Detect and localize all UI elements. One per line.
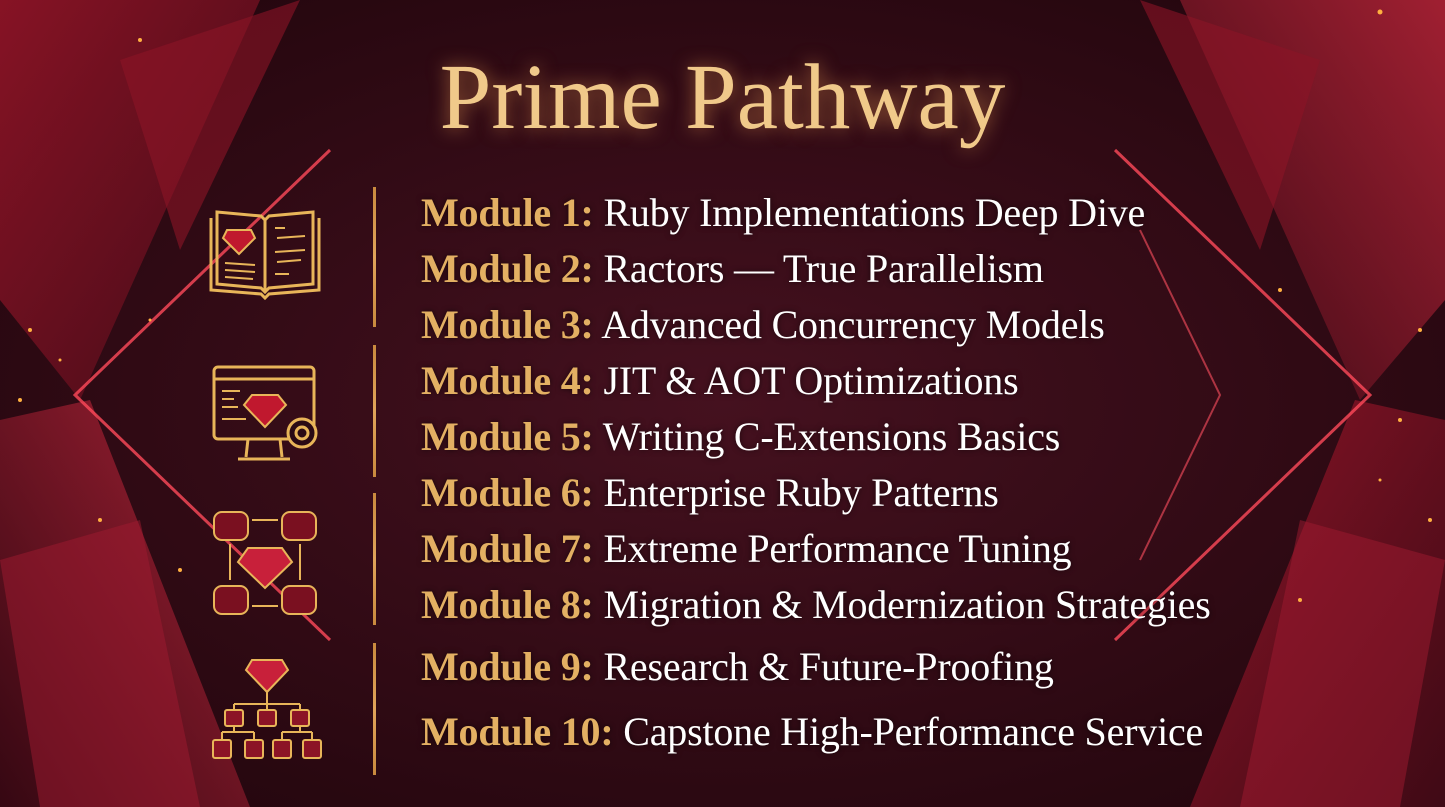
module 8: Module 8: Migration & Modernization Strategies <box>421 582 1211 627</box>
icon: ruby hierarchy <box>212 659 322 759</box>
module 5: Module 5: Writing C-Extensions Basics <box>421 414 1060 459</box>
module 1: Module 1: Ruby Implementations Deep Dive <box>421 190 1145 235</box>
icon: rubies cycle <box>213 511 317 615</box>
module list <box>421 190 1211 754</box>
module 3: Module 3: Advanced Concurrency Models <box>421 302 1105 347</box>
module 4: Module 4: JIT & AOT Optimizations <box>421 358 1018 403</box>
module 9: Module 9: Research & Future-Proofing <box>421 644 1054 689</box>
module 7: Module 7: Extreme Performance Tuning <box>421 526 1071 571</box>
title: Prime Pathway <box>440 46 1005 149</box>
icon: monitor with ruby and gear <box>212 366 318 460</box>
icon: open book with ruby <box>210 210 320 300</box>
module 2: Module 2: Ractors — True Parallelism <box>421 246 1044 291</box>
divider lines <box>373 187 376 327</box>
module 10: Module 10: Capstone High-Performance Service <box>421 709 1203 754</box>
module 6: Module 6: Enterprise Ruby Patterns <box>421 470 999 515</box>
